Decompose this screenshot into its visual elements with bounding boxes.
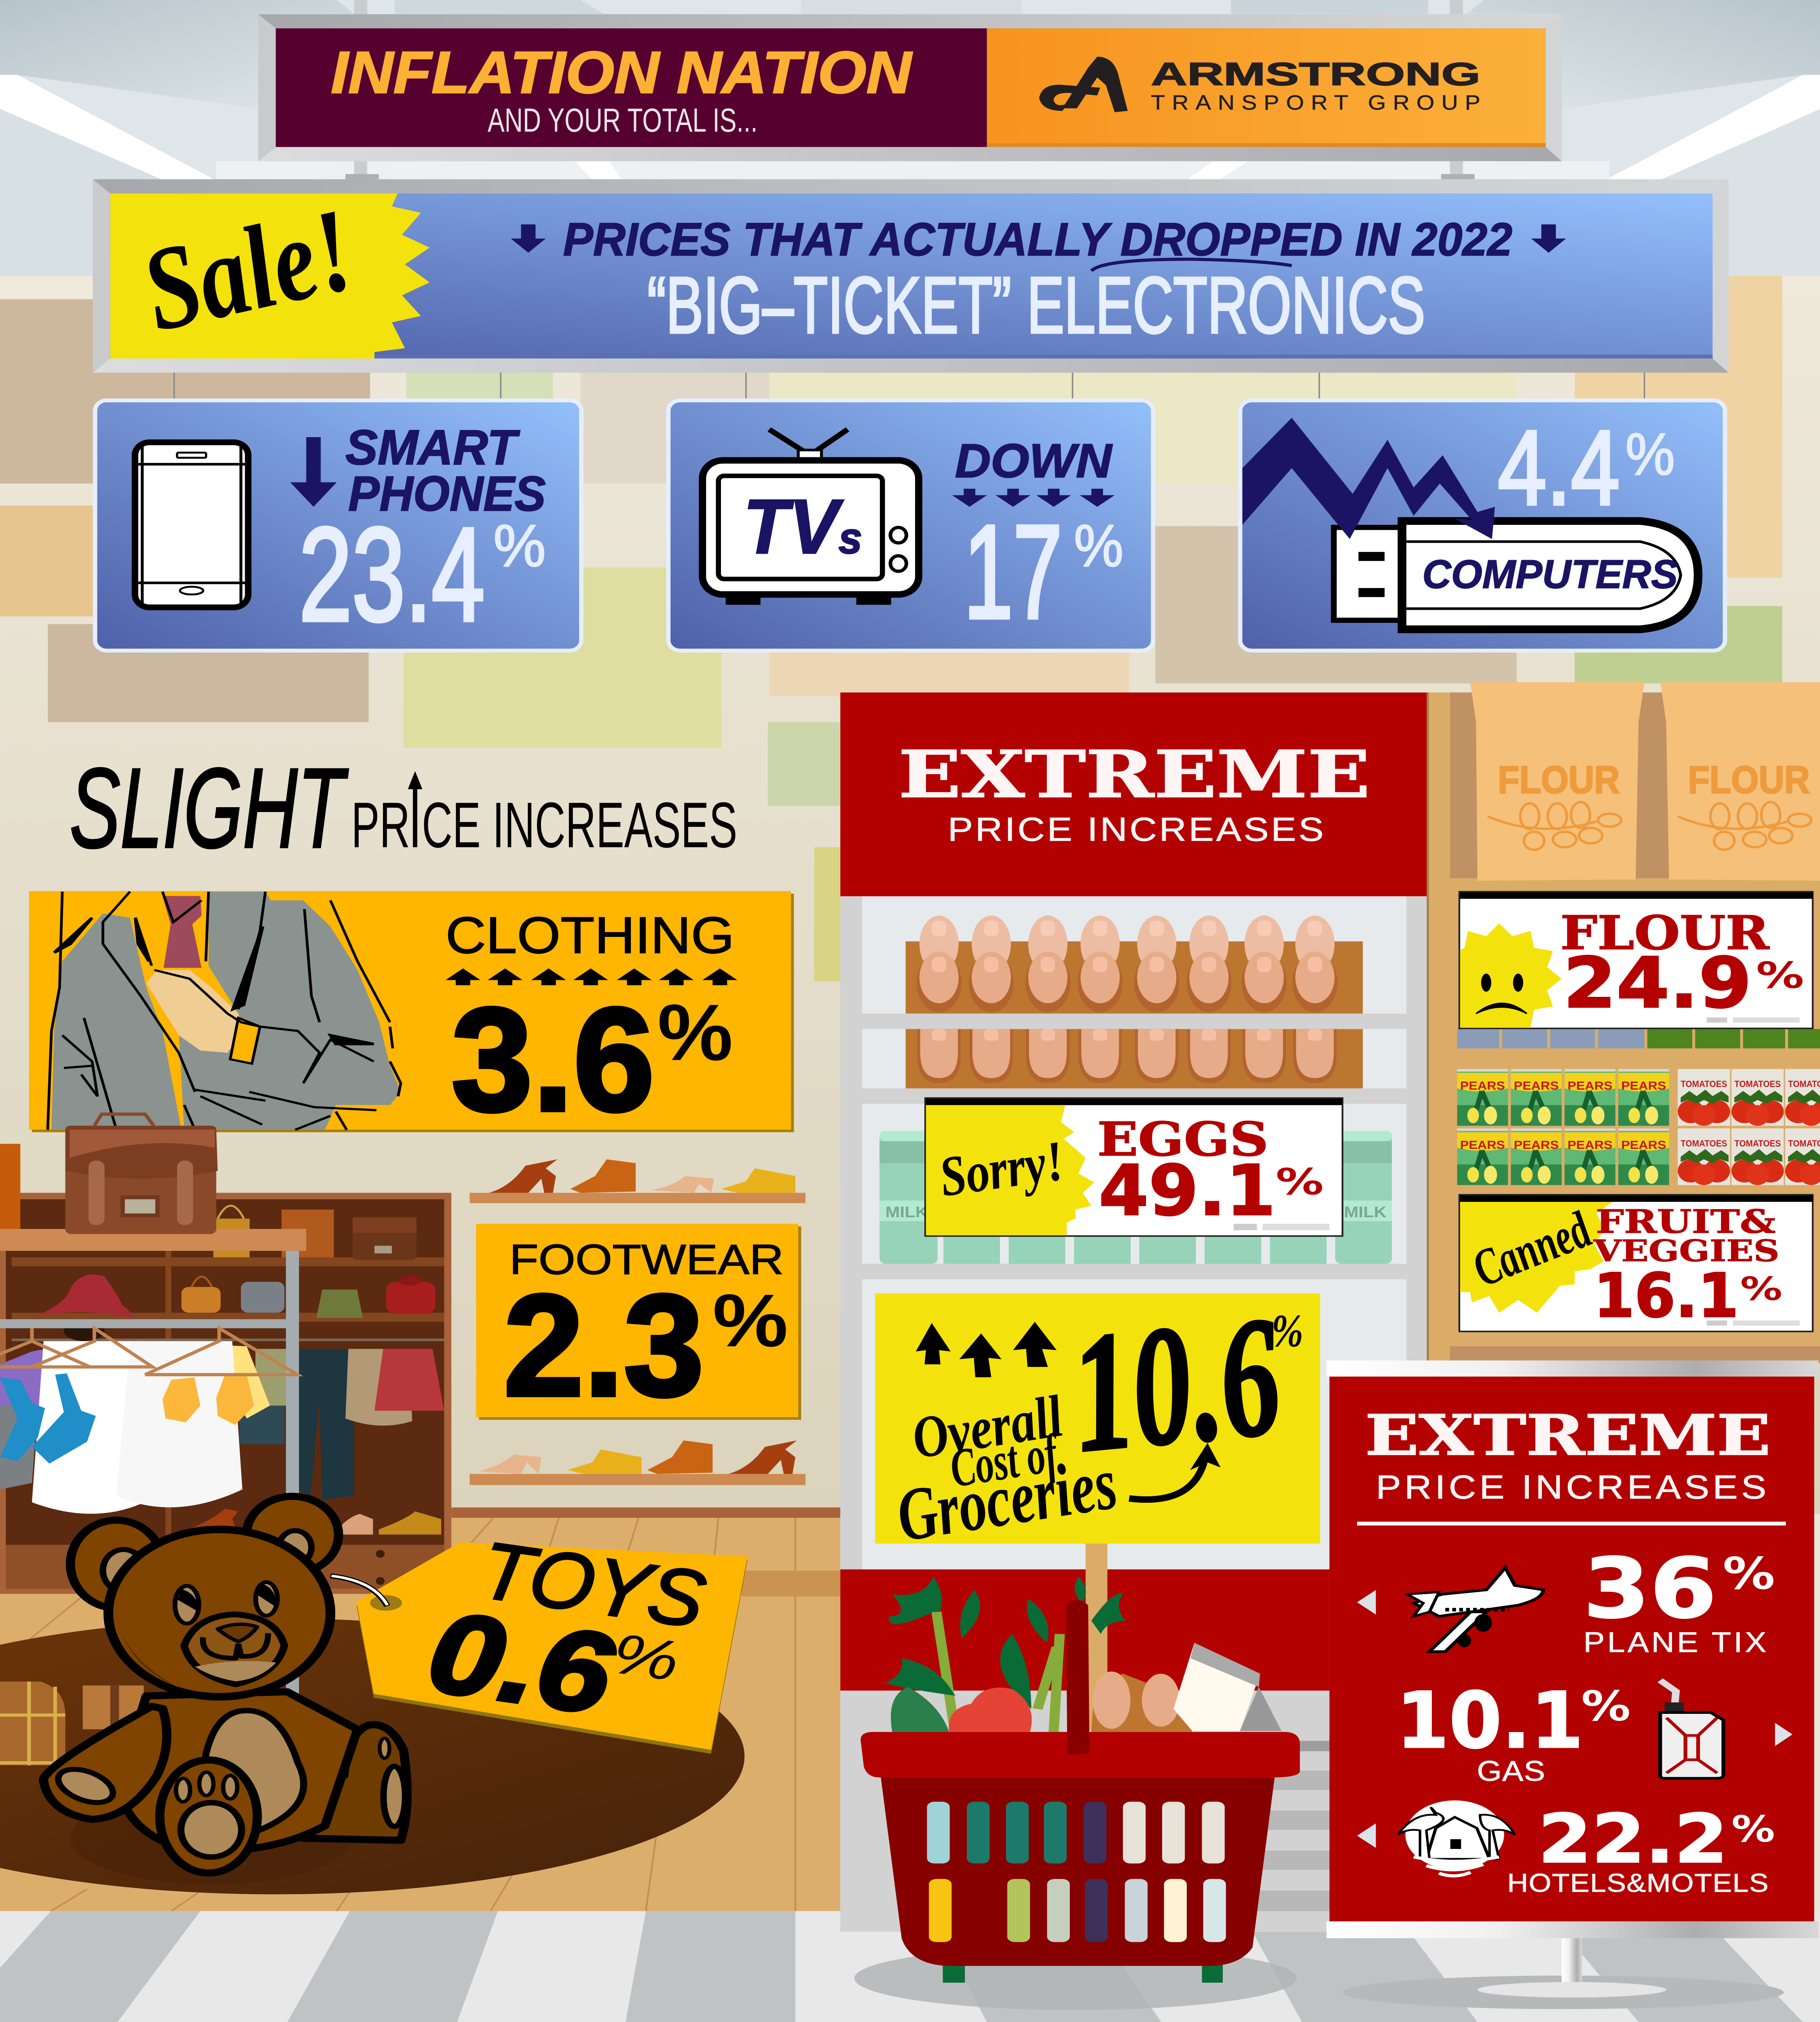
milk cartons: MILK — [885, 1203, 928, 1221]
flour bag: FLOUR — [1498, 758, 1620, 802]
shopping basket — [854, 1577, 1300, 2010]
value 16.1 percent: % — [1740, 1270, 1782, 1308]
panel: footwear — [476, 1224, 801, 1426]
value 36 percent: % — [1723, 1548, 1775, 1599]
icon: gas can — [1660, 1680, 1723, 1778]
value 49.1 percent: % — [1276, 1161, 1323, 1203]
gas label: GAS — [1477, 1755, 1545, 1787]
panel: tvs — [668, 400, 1153, 651]
heading: slight price increases: PR CE INCREASES — [351, 789, 737, 861]
label smart phones: SMART — [345, 420, 520, 475]
down arrow left — [511, 224, 546, 253]
banner: extreme price increases travel — [1327, 1360, 1818, 1938]
tomato cans: TOMATOES — [1734, 1138, 1781, 1148]
value 23.4 percent: % — [493, 513, 546, 579]
overall cost of groceries script — [890, 1383, 1123, 1557]
cabinet shoes — [182, 1509, 441, 1535]
tile floor — [0, 1911, 1820, 2022]
flour bag — [1470, 682, 1645, 881]
arrow down — [290, 437, 337, 507]
teddy bear — [43, 1496, 407, 1884]
icon: television — [702, 429, 919, 605]
flour label: FLOUR — [1560, 905, 1770, 960]
value 36 percent: 36 — [1583, 1541, 1716, 1637]
wood floor — [0, 1518, 840, 1911]
panel: clothing — [29, 891, 794, 1142]
value 23.4 percent: 23.4 — [299, 500, 485, 649]
value 22.2 percent: % — [1731, 1808, 1775, 1850]
clothing label: CLOTHING — [446, 906, 734, 964]
seven up arrows — [446, 969, 737, 985]
tomato cans — [1678, 1069, 1820, 1185]
toys label: TOYS — [474, 1525, 712, 1645]
groceries in basket — [886, 1577, 1281, 1736]
title: inflation nation: INFLATION NATION — [331, 40, 913, 106]
store shelving — [1427, 682, 1820, 1363]
icon: phone — [135, 442, 248, 607]
eggs tray bottom — [906, 1029, 1363, 1088]
tomato cans: TOMATOES — [1734, 1079, 1781, 1089]
prices dropped heading: PRICES THAT ACTUALLY DROPPED IN 2022 — [563, 213, 1512, 265]
header: extreme price increases — [840, 692, 1428, 896]
value 16.1 percent: 16.1 — [1594, 1261, 1739, 1331]
hanging clothes — [0, 1341, 270, 1514]
basket windows — [927, 1802, 1226, 1942]
heading: slight price increases: SLIGHT — [70, 745, 349, 871]
sad sun icon — [1460, 923, 1562, 1028]
pear cans: PEARS — [1621, 1139, 1666, 1152]
value 24.9 percent: 24.9 — [1563, 943, 1752, 1024]
heading: slight price increases — [70, 745, 737, 871]
toy price tag — [357, 1525, 747, 1754]
sale sign — [93, 179, 1729, 373]
rug — [0, 1618, 744, 1894]
bear leg — [303, 1725, 407, 1840]
heading: PRICE INCREASES — [1376, 1468, 1766, 1506]
bear foot — [160, 1760, 257, 1873]
lower fridge band — [840, 1569, 1330, 1932]
top sign: title and logo — [258, 14, 1562, 161]
pear cans: PEARS — [1514, 1139, 1559, 1152]
three up arrows — [916, 1322, 1057, 1377]
flour bag — [1660, 682, 1820, 881]
yellow starburst — [110, 193, 429, 358]
illustration: man in suit — [48, 892, 401, 1130]
pear cans: PEARS — [1567, 1079, 1613, 1092]
triangle left — [1357, 1590, 1376, 1614]
milk cartons — [879, 1131, 1392, 1264]
value 24.9 percent: % — [1756, 955, 1804, 996]
panel: computers — [1240, 400, 1725, 651]
value 22.2 percent: 22.2 — [1538, 1800, 1728, 1878]
shelf bags — [38, 1206, 435, 1341]
pear cans: PEARS — [1460, 1139, 1505, 1152]
triangle right — [1775, 1723, 1793, 1746]
heading: EXTREME — [1365, 1403, 1771, 1468]
bear head — [108, 1529, 330, 1697]
bear body — [119, 1692, 357, 1851]
value 4.4 percent: 4.4 — [1498, 408, 1620, 527]
fruit and veggies label: VEGGIES — [1593, 1234, 1779, 1268]
value 17 percent: % — [1074, 513, 1123, 579]
value 2.3 percent: 2.3 — [503, 1265, 704, 1426]
overall cost of groceries script: Overall — [907, 1383, 1068, 1471]
bear arm — [43, 1707, 167, 1819]
icon: usb drive — [1334, 521, 1698, 629]
pear cans — [1457, 1069, 1669, 1185]
value 10.6 percent: 10.6 — [1063, 1281, 1290, 1487]
logo wordmark: ARMSTRONG — [1151, 56, 1480, 92]
pear cans: PEARS — [1567, 1139, 1613, 1152]
header: extreme price increases: PRICE INCREASES — [948, 810, 1323, 848]
label down: DOWN — [955, 434, 1113, 487]
footwear label: FOOTWEAR — [509, 1236, 784, 1283]
value 2.3 percent: % — [712, 1279, 788, 1362]
eggs label: EGGS — [1097, 1112, 1268, 1166]
tvs label: TVs — [743, 484, 862, 570]
pear cans: PEARS — [1621, 1079, 1666, 1092]
wall — [0, 276, 1820, 1514]
hat — [38, 1275, 131, 1318]
pear cans: PEARS — [1514, 1079, 1559, 1092]
underline swoosh — [1091, 259, 1292, 271]
hanging strings — [174, 373, 1645, 398]
value 10.1 percent: % — [1581, 1682, 1631, 1730]
shoe shelf bottom — [470, 1440, 805, 1485]
sale script: Sale! — [128, 183, 368, 356]
zigzag price arrow — [1242, 418, 1495, 539]
value 0.6 percent: % — [607, 1621, 684, 1693]
table top — [0, 1229, 306, 1251]
shoe shelf top — [470, 1159, 805, 1203]
overall cost of groceries script: Cost of — [945, 1422, 1065, 1498]
logo icon — [1039, 57, 1128, 112]
logo wordmark — [1151, 56, 1480, 114]
value 10.6 percent: % — [1271, 1305, 1303, 1356]
plane tix label: PLANE TIX — [1583, 1626, 1766, 1658]
sign: flour — [1459, 892, 1813, 1028]
sorry script: Sorry! — [934, 1129, 1069, 1208]
down arrow right — [1531, 224, 1566, 253]
value 0.6 percent: 0.6 — [420, 1588, 622, 1738]
header: extreme price increases: EXTREME — [898, 737, 1370, 812]
tomato cans: TOMATOES — [1680, 1079, 1727, 1089]
label smart phones — [345, 420, 546, 521]
milk cartons: MILK — [1344, 1203, 1387, 1221]
value 0.6 percent — [420, 1588, 686, 1747]
briefcase — [66, 1114, 218, 1234]
grocery fridge — [840, 896, 1428, 1569]
fruit and veggies label — [1593, 1203, 1779, 1268]
triangle left — [1357, 1823, 1376, 1848]
icon: beach hotel — [1398, 1800, 1515, 1876]
value 3.6 percent: % — [657, 988, 733, 1077]
value 17 percent: 17 — [964, 498, 1062, 646]
orange suitcase — [0, 1144, 20, 1230]
computers label: COMPUTERS — [1423, 552, 1678, 597]
clothes rack — [0, 1251, 299, 1696]
pear cans: PEARS — [1460, 1079, 1505, 1092]
value 4.4 percent: % — [1626, 421, 1675, 487]
sign: canned fruit and veggies — [1459, 1195, 1813, 1331]
banner poles — [345, 0, 1475, 179]
hotels and motels label: HOTELS&MOTELS — [1507, 1869, 1769, 1897]
display cabinet — [0, 1193, 451, 1594]
sign: eggs — [925, 1098, 1342, 1236]
tag string — [330, 1576, 387, 1606]
heading — [1365, 1403, 1771, 1506]
canned script: Canned — [1463, 1201, 1601, 1297]
eggs tray top — [906, 916, 1363, 1013]
logo wordmark: TRANSPORT GROUP — [1151, 91, 1480, 114]
value 36 percent — [1583, 1541, 1775, 1637]
sign: overall cost of groceries — [875, 1281, 1320, 1730]
value 49.1 percent: 49.1 — [1099, 1151, 1276, 1231]
floor stand — [1342, 1938, 1784, 2009]
icon: airplane — [1407, 1568, 1543, 1652]
wall colour blocks — [0, 276, 1782, 981]
value 10.6 percent — [1063, 1281, 1303, 1487]
value 10.1 percent: 10.1 — [1396, 1676, 1583, 1766]
treasure chest and crate — [0, 1681, 144, 1765]
tomato cans: TOMATOES — [1680, 1138, 1727, 1148]
bear ears — [70, 1496, 338, 1608]
ceiling — [0, 0, 1820, 277]
four down arrows — [952, 489, 1115, 507]
label smart phones: PHONES — [348, 467, 546, 521]
panel: smart phones — [95, 400, 581, 651]
hanging garments in cabinet — [239, 1349, 444, 1500]
value 3.6 percent: 3.6 — [451, 978, 655, 1142]
overall cost of groceries script: Groceries — [890, 1441, 1123, 1557]
subtitle: AND YOUR TOTAL IS... — [488, 101, 758, 139]
curved arrow — [1129, 1443, 1221, 1500]
fruit and veggies label: FRUIT& — [1596, 1203, 1776, 1241]
